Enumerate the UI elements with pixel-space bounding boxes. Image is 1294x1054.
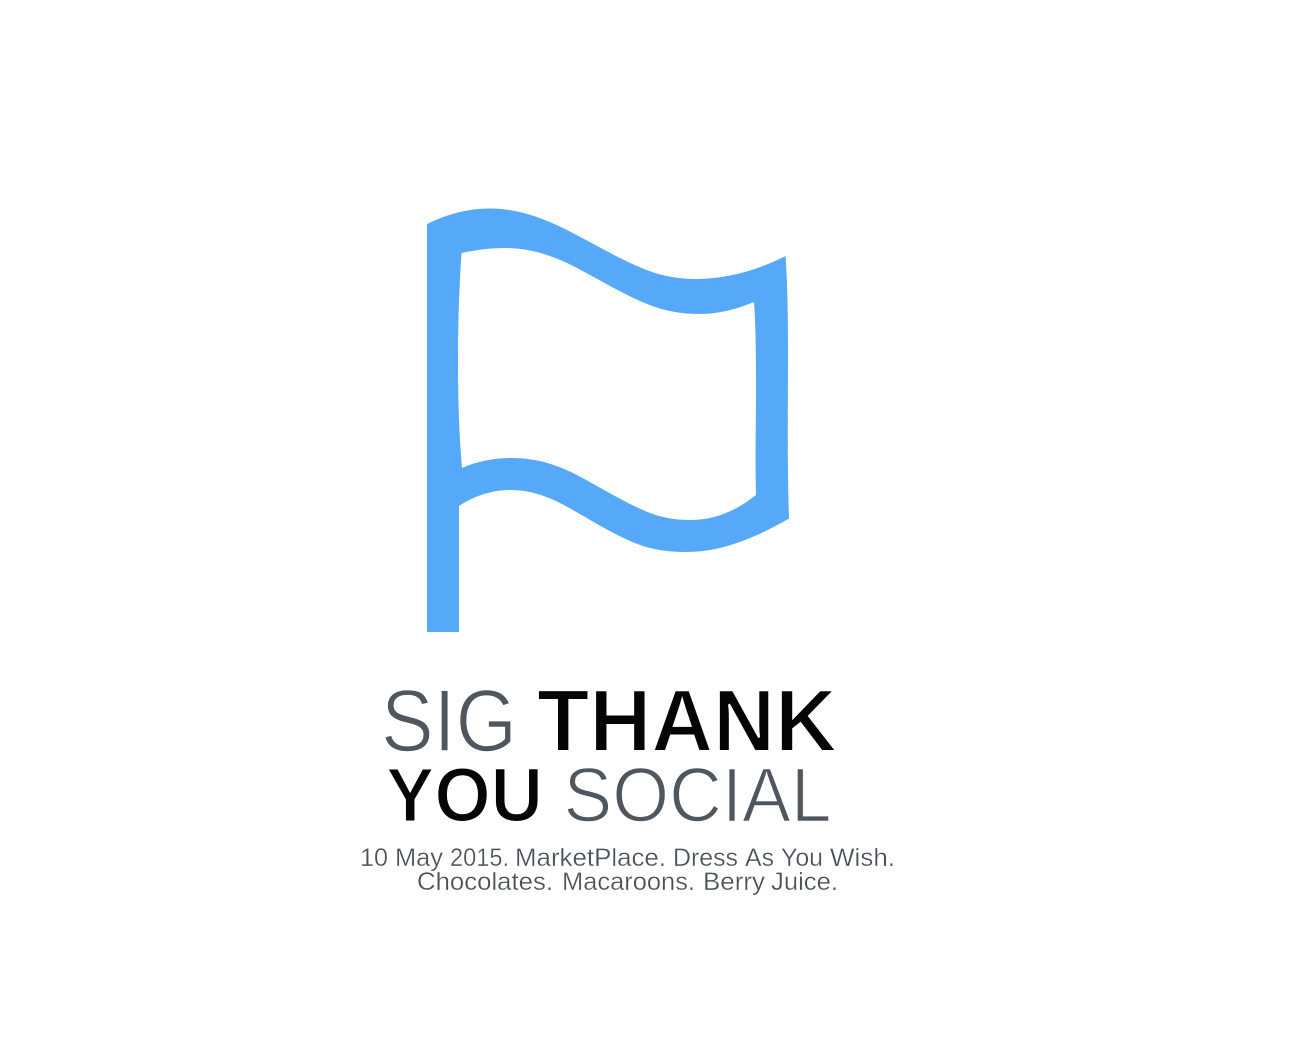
subtitle text: 2015. [450, 844, 509, 872]
subtitle text: 10 [360, 844, 388, 872]
title line 1 [381, 671, 837, 770]
icon: blue flag [427, 208, 789, 632]
subtitle text: Dress [673, 844, 738, 872]
title line 2: YOU [386, 752, 543, 838]
subtitle text: MarketPlace. [515, 844, 666, 872]
subtitle text: Berry [703, 868, 766, 896]
subtitle text: As [745, 844, 774, 872]
subtitle text: Juice. [771, 868, 838, 896]
title line 1: SIG [381, 671, 517, 770]
subtitle text: May [395, 844, 444, 872]
title line 2: SOCIAL [564, 752, 832, 838]
title line 2 [386, 752, 832, 838]
subtitle text: Macaroons. [562, 868, 695, 896]
subtitle text: You [781, 844, 823, 872]
subtitle text: Chocolates. [417, 868, 553, 896]
subtitle text: Wish. [830, 844, 895, 872]
title line 1: THANK [537, 671, 837, 770]
subtitle text [360, 844, 895, 896]
